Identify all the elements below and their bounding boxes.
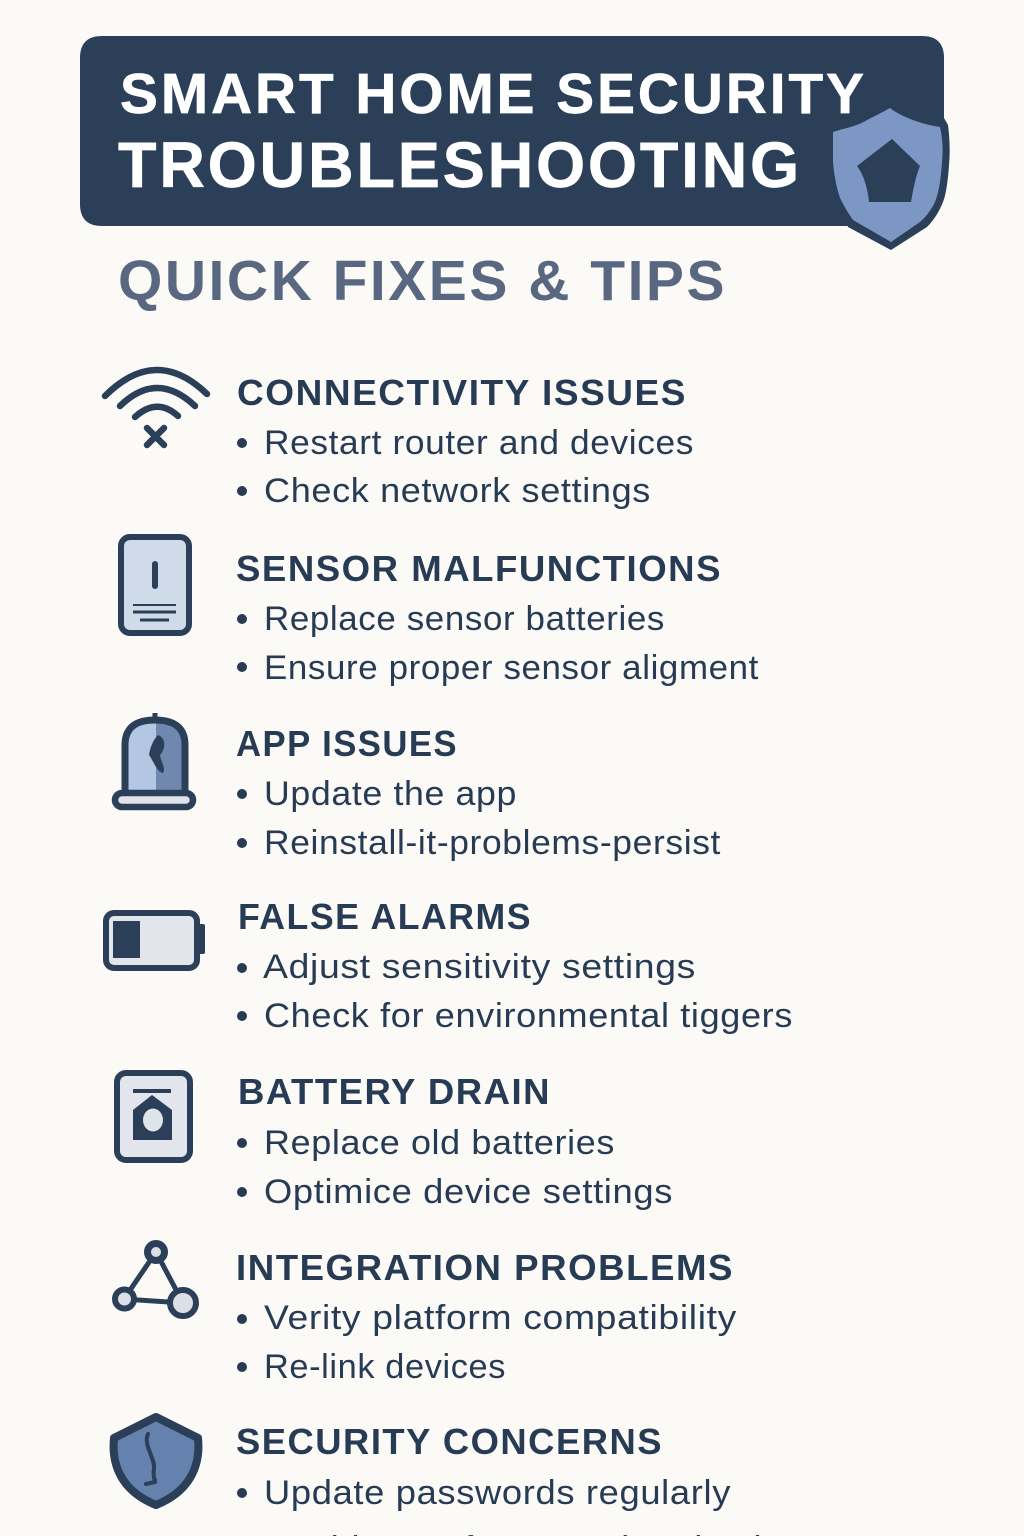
section: security concerns — [114, 1417, 804, 1536]
section: app issues: Update the app — [264, 775, 517, 813]
section: false alarms: Check for environmental tiggers — [264, 997, 793, 1035]
icon: wifi with x — [105, 370, 207, 445]
section: security concerns: Update passwords regularly — [264, 1474, 731, 1512]
section: connectivity issues: Restart router and devices — [264, 424, 694, 462]
section: connectivity issues: CONNECTIVITY ISSUES — [237, 372, 687, 413]
title banner: SMART HOME SECURITY — [120, 62, 867, 126]
title banner — [80, 36, 944, 226]
section: connectivity issues: Check network settings — [264, 472, 651, 510]
icon: alarm siren — [115, 713, 193, 807]
section: sensor malfunctions: Ensure proper sensor aligment — [264, 649, 759, 687]
icon: low battery — [106, 913, 205, 968]
section: battery drain: Optimice device settings — [264, 1173, 673, 1211]
section: integration problems — [115, 1244, 737, 1386]
icon: alert shield — [114, 1417, 198, 1505]
section: integration problems: INTEGRATION PROBLEMS — [236, 1247, 734, 1288]
icon: network triangle — [115, 1244, 196, 1316]
section: integration problems: Verity platform compatibility — [264, 1299, 737, 1337]
section: battery drain: Replace old batteries — [264, 1124, 615, 1162]
section: battery drain: BATTERY DRAIN — [238, 1071, 551, 1112]
section: security concerns: SECURITY CONCERNS — [236, 1421, 663, 1462]
section: connectivity issues — [105, 370, 694, 510]
section: false alarms — [106, 896, 793, 1035]
section: sensor malfunctions: SENSOR MALFUNCTIONS — [236, 548, 722, 589]
section: sensor malfunctions — [121, 537, 759, 687]
section: false alarms: FALSE ALARMS — [238, 896, 532, 937]
icon: banner shield with house — [833, 108, 950, 250]
section: app issues — [115, 713, 721, 862]
subtitle: QUICK FIXES & TIPS — [118, 249, 727, 313]
icon: door sensor — [121, 537, 189, 633]
section: integration problems: Re-link devices — [264, 1348, 506, 1386]
section: sensor malfunctions: Replace sensor batteries — [264, 600, 665, 638]
title banner: TROUBLESHOOTING — [118, 129, 802, 201]
section: app issues: Reinstall-it-problems-persist — [264, 824, 721, 862]
section: battery drain — [117, 1071, 673, 1211]
icon: home device — [117, 1073, 190, 1160]
section: app issues: APP ISSUES — [236, 723, 458, 764]
section: false alarms: Adjust sensitivity settings — [263, 948, 696, 986]
